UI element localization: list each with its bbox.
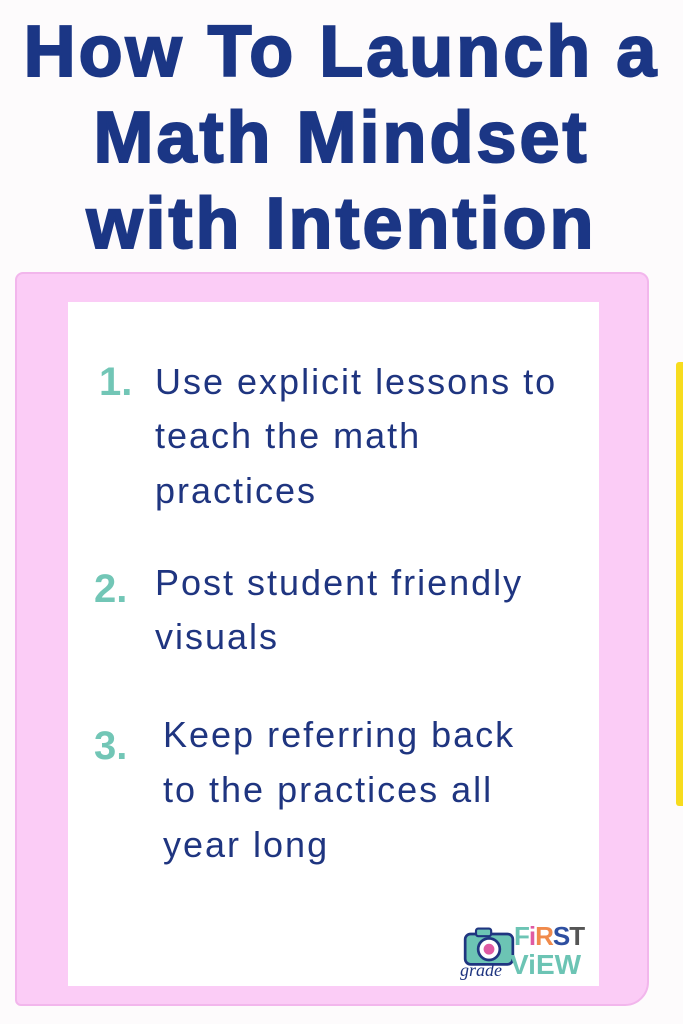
item 1: 1. [99,360,132,404]
item 1: practices [155,470,317,511]
item 2: Post student friendly [155,562,523,603]
icon: camera [464,928,514,966]
item 1: teach the math [155,415,421,456]
title: Math Mindset [94,98,589,178]
title: How To Launch a [24,12,659,92]
panel: binder [15,272,649,1006]
item 3: Keep referring back [163,714,515,755]
icon: pencil [676,362,683,806]
logo: First Grade View: ViEW [510,949,581,980]
title: with Intention [87,184,596,264]
item 1 [99,360,557,511]
item 2: visuals [155,616,279,657]
item 3 [94,714,515,865]
item 2: 2. [94,567,127,611]
panel: white page [68,302,599,986]
item 3: 3. [94,724,127,768]
item 3: year long [163,824,329,865]
title [24,12,659,264]
logo: First Grade View [460,921,585,980]
item 3: to the practices all [163,769,493,810]
logo: First Grade View: FiRST [514,921,584,951]
logo: First Grade View: grade [460,960,502,980]
item 2 [94,562,523,657]
item 1: Use explicit lessons to [155,361,557,402]
